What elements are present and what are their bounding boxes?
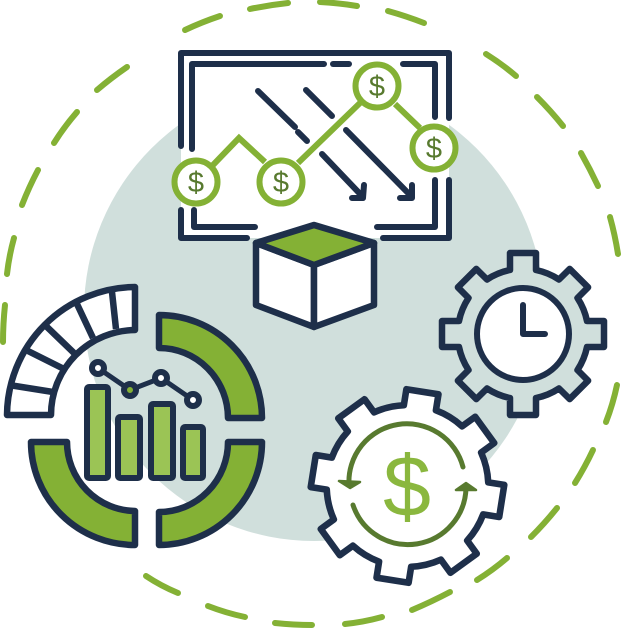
circular arrows: [339, 424, 476, 545]
icon: dollar coin 4: [412, 126, 456, 170]
icon: dollar coin 3: [356, 64, 398, 108]
icon: dollar coin 1: $: [188, 167, 204, 199]
panel: price chart board: [174, 53, 456, 238]
icon: dollar gear: [298, 377, 517, 595]
dollar sign: $: [383, 439, 431, 535]
icon: dollar coin 3: $: [369, 71, 385, 103]
white segmented arc: [7, 287, 135, 415]
line chart with markers: [92, 362, 199, 406]
bar chart: [87, 387, 203, 478]
panel: dashboard ring chart: [7, 287, 262, 545]
icon: dollar coin 2: [260, 160, 302, 204]
icon: dollar coin 1: [174, 160, 218, 204]
icon: dollar coin 2: $: [273, 167, 289, 199]
green ring segments: [31, 315, 262, 545]
rising price line: [213, 103, 420, 165]
falling dashed arrows: [258, 90, 412, 198]
icon: box: [256, 225, 374, 327]
icon: clock gear: [442, 253, 604, 415]
gear outline: [298, 377, 517, 595]
board frame: [181, 53, 449, 238]
icon: dollar coin 4: $: [426, 133, 442, 165]
background circle: [84, 81, 544, 541]
board background: [181, 53, 449, 238]
